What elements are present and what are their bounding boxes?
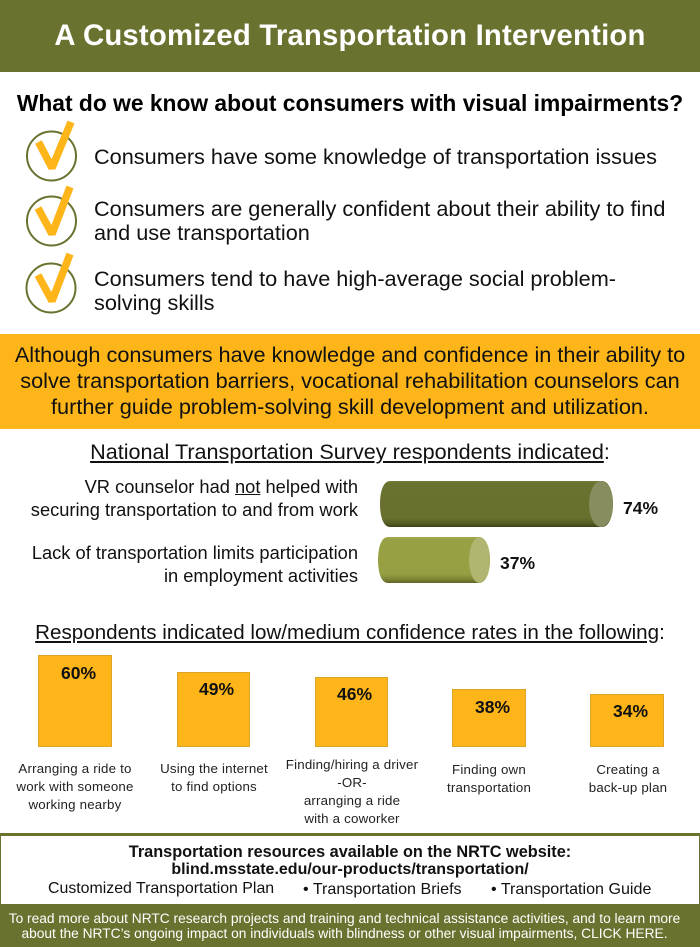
callout band: solve transportation barriers, vocational rehabilitation counselors can	[20, 368, 680, 393]
resource: briefs: • Transportation Briefs	[303, 880, 462, 898]
resources panel	[0, 833, 700, 905]
label: VR counselor	[31, 476, 358, 520]
label: finding a driver: with a coworker	[304, 811, 400, 826]
value: 38%: 38%	[475, 697, 510, 717]
label: finding own transportation: Finding own	[452, 762, 526, 777]
knowledge statement: Consumers have some knowledge of transportation issues	[94, 144, 657, 169]
cylinder bar chart	[378, 481, 613, 583]
label: finding a driver	[286, 757, 418, 826]
label: arranging a ride: work with someone	[16, 779, 134, 794]
label: finding a driver: -OR-	[337, 775, 367, 790]
label: finding a driver: arranging a ride	[304, 793, 400, 808]
label: lack of transportation: Lack of transportation limits participation	[32, 542, 358, 563]
confidence statement	[94, 196, 665, 245]
label: arranging a ride	[16, 761, 134, 812]
value: 46%: 46%	[337, 684, 372, 704]
label: arranging a ride: working nearby	[28, 797, 121, 812]
title banner	[0, 0, 700, 72]
title banner: A Customized Transportation Intervention	[54, 19, 646, 52]
label: finding own transportation	[447, 762, 531, 795]
label: finding own transportation: transportation	[447, 780, 531, 795]
callout band: further guide problem-solving skill development and utilization.	[51, 394, 649, 419]
value: 60%: 60%	[61, 663, 96, 683]
problem-solving statement	[94, 266, 616, 315]
confidence statement: Consumers are generally confident about their ability to find	[94, 196, 665, 221]
heading: what do we know: What do we know about consumers with visual impairments?	[17, 90, 683, 116]
bar: 74%	[380, 481, 613, 527]
icon: check 1	[26, 120, 77, 182]
confidence statement: and use transportation	[94, 220, 310, 245]
label: back-up plan: Creating a	[596, 762, 660, 777]
value: 34%: 34%	[613, 701, 648, 721]
problem-solving statement: Consumers tend to have high-average social problem-	[94, 266, 616, 291]
label: finding a driver: Finding/hiring a driver	[286, 757, 418, 772]
callout band: Although consumers have knowledge and confidence in their ability to	[15, 342, 685, 367]
resource: plan: Customized Transportation Plan	[48, 880, 274, 897]
bar: 37%	[378, 537, 490, 583]
icon: check 2	[26, 186, 77, 246]
value: 74%: 74%	[623, 498, 658, 518]
label: using the internet	[160, 761, 268, 794]
resources heading: Transportation resources available on the NRTC website:	[129, 843, 571, 861]
bar: 60%	[38, 655, 112, 747]
icon: check 3	[26, 252, 76, 314]
bar: 34%	[590, 694, 664, 747]
callout band	[0, 334, 700, 429]
resource: guide: • Transportation Guide	[491, 880, 651, 898]
label: VR counselor: securing transportation to and from work	[31, 498, 358, 520]
footer banner: To read more about NRTC research projects and training and technical assistance activities, and to learn more	[9, 911, 680, 926]
label: using the internet: Using the internet	[160, 761, 268, 776]
footer banner: about the NRTC’s ongoing impact on individuals with blindness or other visual impairments, CLICK HERE.	[21, 926, 668, 941]
value: 49%: 49%	[199, 679, 234, 699]
bar: 38%	[452, 689, 526, 747]
label: VR counselor: VR counselor had not helped with	[85, 476, 358, 497]
value: 37%: 37%	[500, 553, 535, 573]
heading: confidence: Respondents indicated low/medium confidence rates in the following:	[35, 621, 665, 644]
heading: survey: National Transportation Survey respondents indicated:	[90, 439, 610, 464]
label: arranging a ride: Arranging a ride to	[18, 761, 132, 776]
label: back-up plan	[589, 762, 667, 795]
footer banner	[0, 904, 700, 947]
label: back-up plan: back-up plan	[589, 780, 667, 795]
bar: 46%	[315, 677, 388, 747]
label: lack of transportation	[32, 542, 358, 586]
label: lack of transportation: in employment activities	[164, 564, 358, 586]
bar: 49%	[177, 672, 250, 747]
problem-solving statement: solving skills	[94, 290, 215, 315]
resources url: blind.msstate.edu/our-products/transportation/	[171, 861, 529, 878]
label: using the internet: to find options	[171, 779, 257, 794]
